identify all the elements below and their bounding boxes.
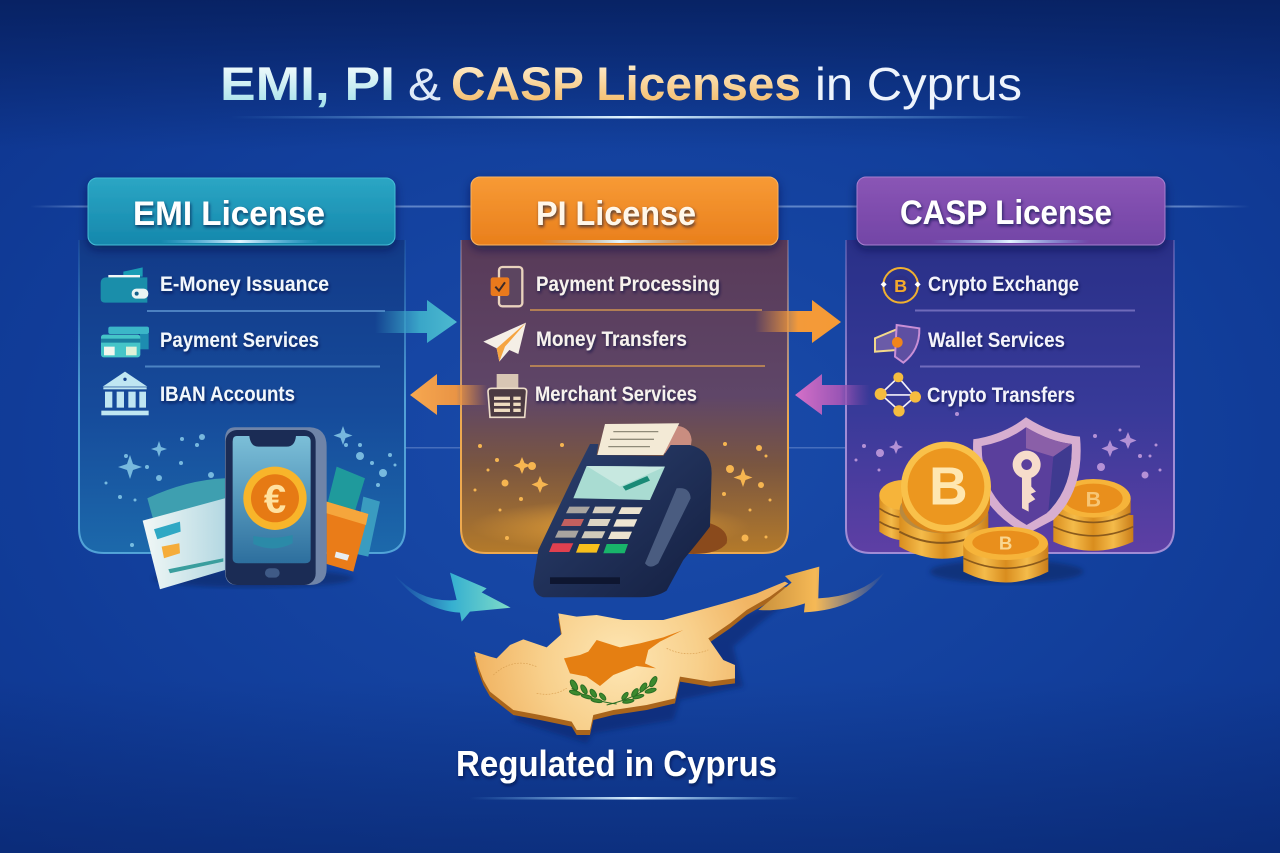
front coin stack [963, 527, 1048, 582]
icon: paper plane [483, 323, 526, 362]
text: Regulated in Cyprus: Regulated in Cyprus [456, 743, 777, 784]
title: & [408, 59, 441, 110]
panel: PI license [461, 177, 788, 553]
arrow: CASP to PI [795, 374, 870, 415]
euro coin: € [264, 478, 286, 522]
header: EMI License: EMI License [133, 195, 325, 233]
printed receipt [597, 423, 692, 455]
left coin stack [879, 480, 927, 541]
keypad [549, 507, 643, 553]
icon: phone with check [491, 267, 522, 306]
text: Crypto Exchange: Crypto Exchange [928, 273, 1079, 296]
text: IBAN Accounts: IBAN Accounts [160, 383, 295, 406]
icon: crypto exchange [881, 268, 921, 303]
text: E-Money Issuance: E-Money Issuance [160, 273, 329, 296]
panel: CASP license [846, 177, 1174, 553]
title [220, 57, 1022, 110]
CASP sparkles [854, 412, 1162, 478]
illustration: POS card terminal [533, 423, 727, 597]
text: Money Transfers: Money Transfers [536, 328, 687, 351]
curved arrow: teal [393, 573, 511, 622]
title: in Cyprus [815, 58, 1022, 110]
text: Crypto Transfers: Crypto Transfers [927, 384, 1075, 407]
right coin stack: B [1086, 488, 1101, 512]
header: PI License [471, 177, 778, 245]
map shadow [513, 600, 790, 743]
orange wallet [327, 502, 368, 572]
main stack with large bitcoin: B [929, 457, 968, 516]
olive branches [569, 675, 658, 705]
text: Payment Processing: Payment Processing [536, 273, 720, 296]
header: CASP License: CASP License [900, 194, 1112, 232]
header: CASP License [857, 177, 1165, 245]
icon: bank [101, 372, 149, 415]
map raised edge [474, 587, 788, 735]
header: EMI License [88, 178, 395, 245]
credit card [143, 498, 225, 589]
shield with key [973, 417, 1081, 534]
terminal shadow [680, 523, 727, 554]
text: Wallet Services: Wallet Services [928, 329, 1065, 352]
PI list divider lines [530, 310, 765, 366]
arrow: EMI to PI [375, 300, 457, 343]
front coin stack: B [999, 532, 1012, 553]
Cyprus map with flag emblem [393, 567, 885, 743]
header: PI License: PI License [536, 195, 696, 233]
curved arrow: gold [758, 567, 885, 612]
illustration: phone with euro coin and cards [143, 427, 380, 589]
euro coin [243, 467, 307, 530]
icon: merchant terminal [488, 374, 527, 417]
phone body [225, 427, 327, 585]
terminal body [533, 444, 712, 597]
PI sparkles [474, 442, 772, 542]
icon: wallet [101, 267, 148, 303]
panel: EMI license [79, 178, 405, 553]
CASP list divider lines [915, 310, 1140, 366]
main stack with large bitcoin [899, 442, 991, 559]
text: Merchant Services: Merchant Services [535, 383, 697, 406]
teal cards behind [147, 467, 380, 557]
title: EMI, PI [220, 57, 395, 110]
EMI list divider lines [145, 311, 385, 366]
map district lines [493, 648, 708, 694]
island map [474, 582, 788, 730]
arrow: PI to CASP [755, 300, 841, 343]
card slot [645, 488, 691, 567]
title: CASP Licenses [451, 57, 801, 110]
icon: payment cards [101, 327, 149, 357]
EMI sparkles [104, 426, 396, 547]
icon: crypto exchange: B [894, 276, 907, 296]
right coin stack [1053, 479, 1133, 551]
icon: wallet shield [875, 325, 919, 363]
icon: crypto network [875, 372, 921, 417]
arrow: PI to EMI [410, 374, 487, 415]
text: Payment Services: Payment Services [160, 329, 319, 352]
terminal screen [573, 466, 665, 500]
orange island emblem [564, 630, 683, 686]
illustration: bitcoin coins and shield with key [879, 417, 1133, 583]
